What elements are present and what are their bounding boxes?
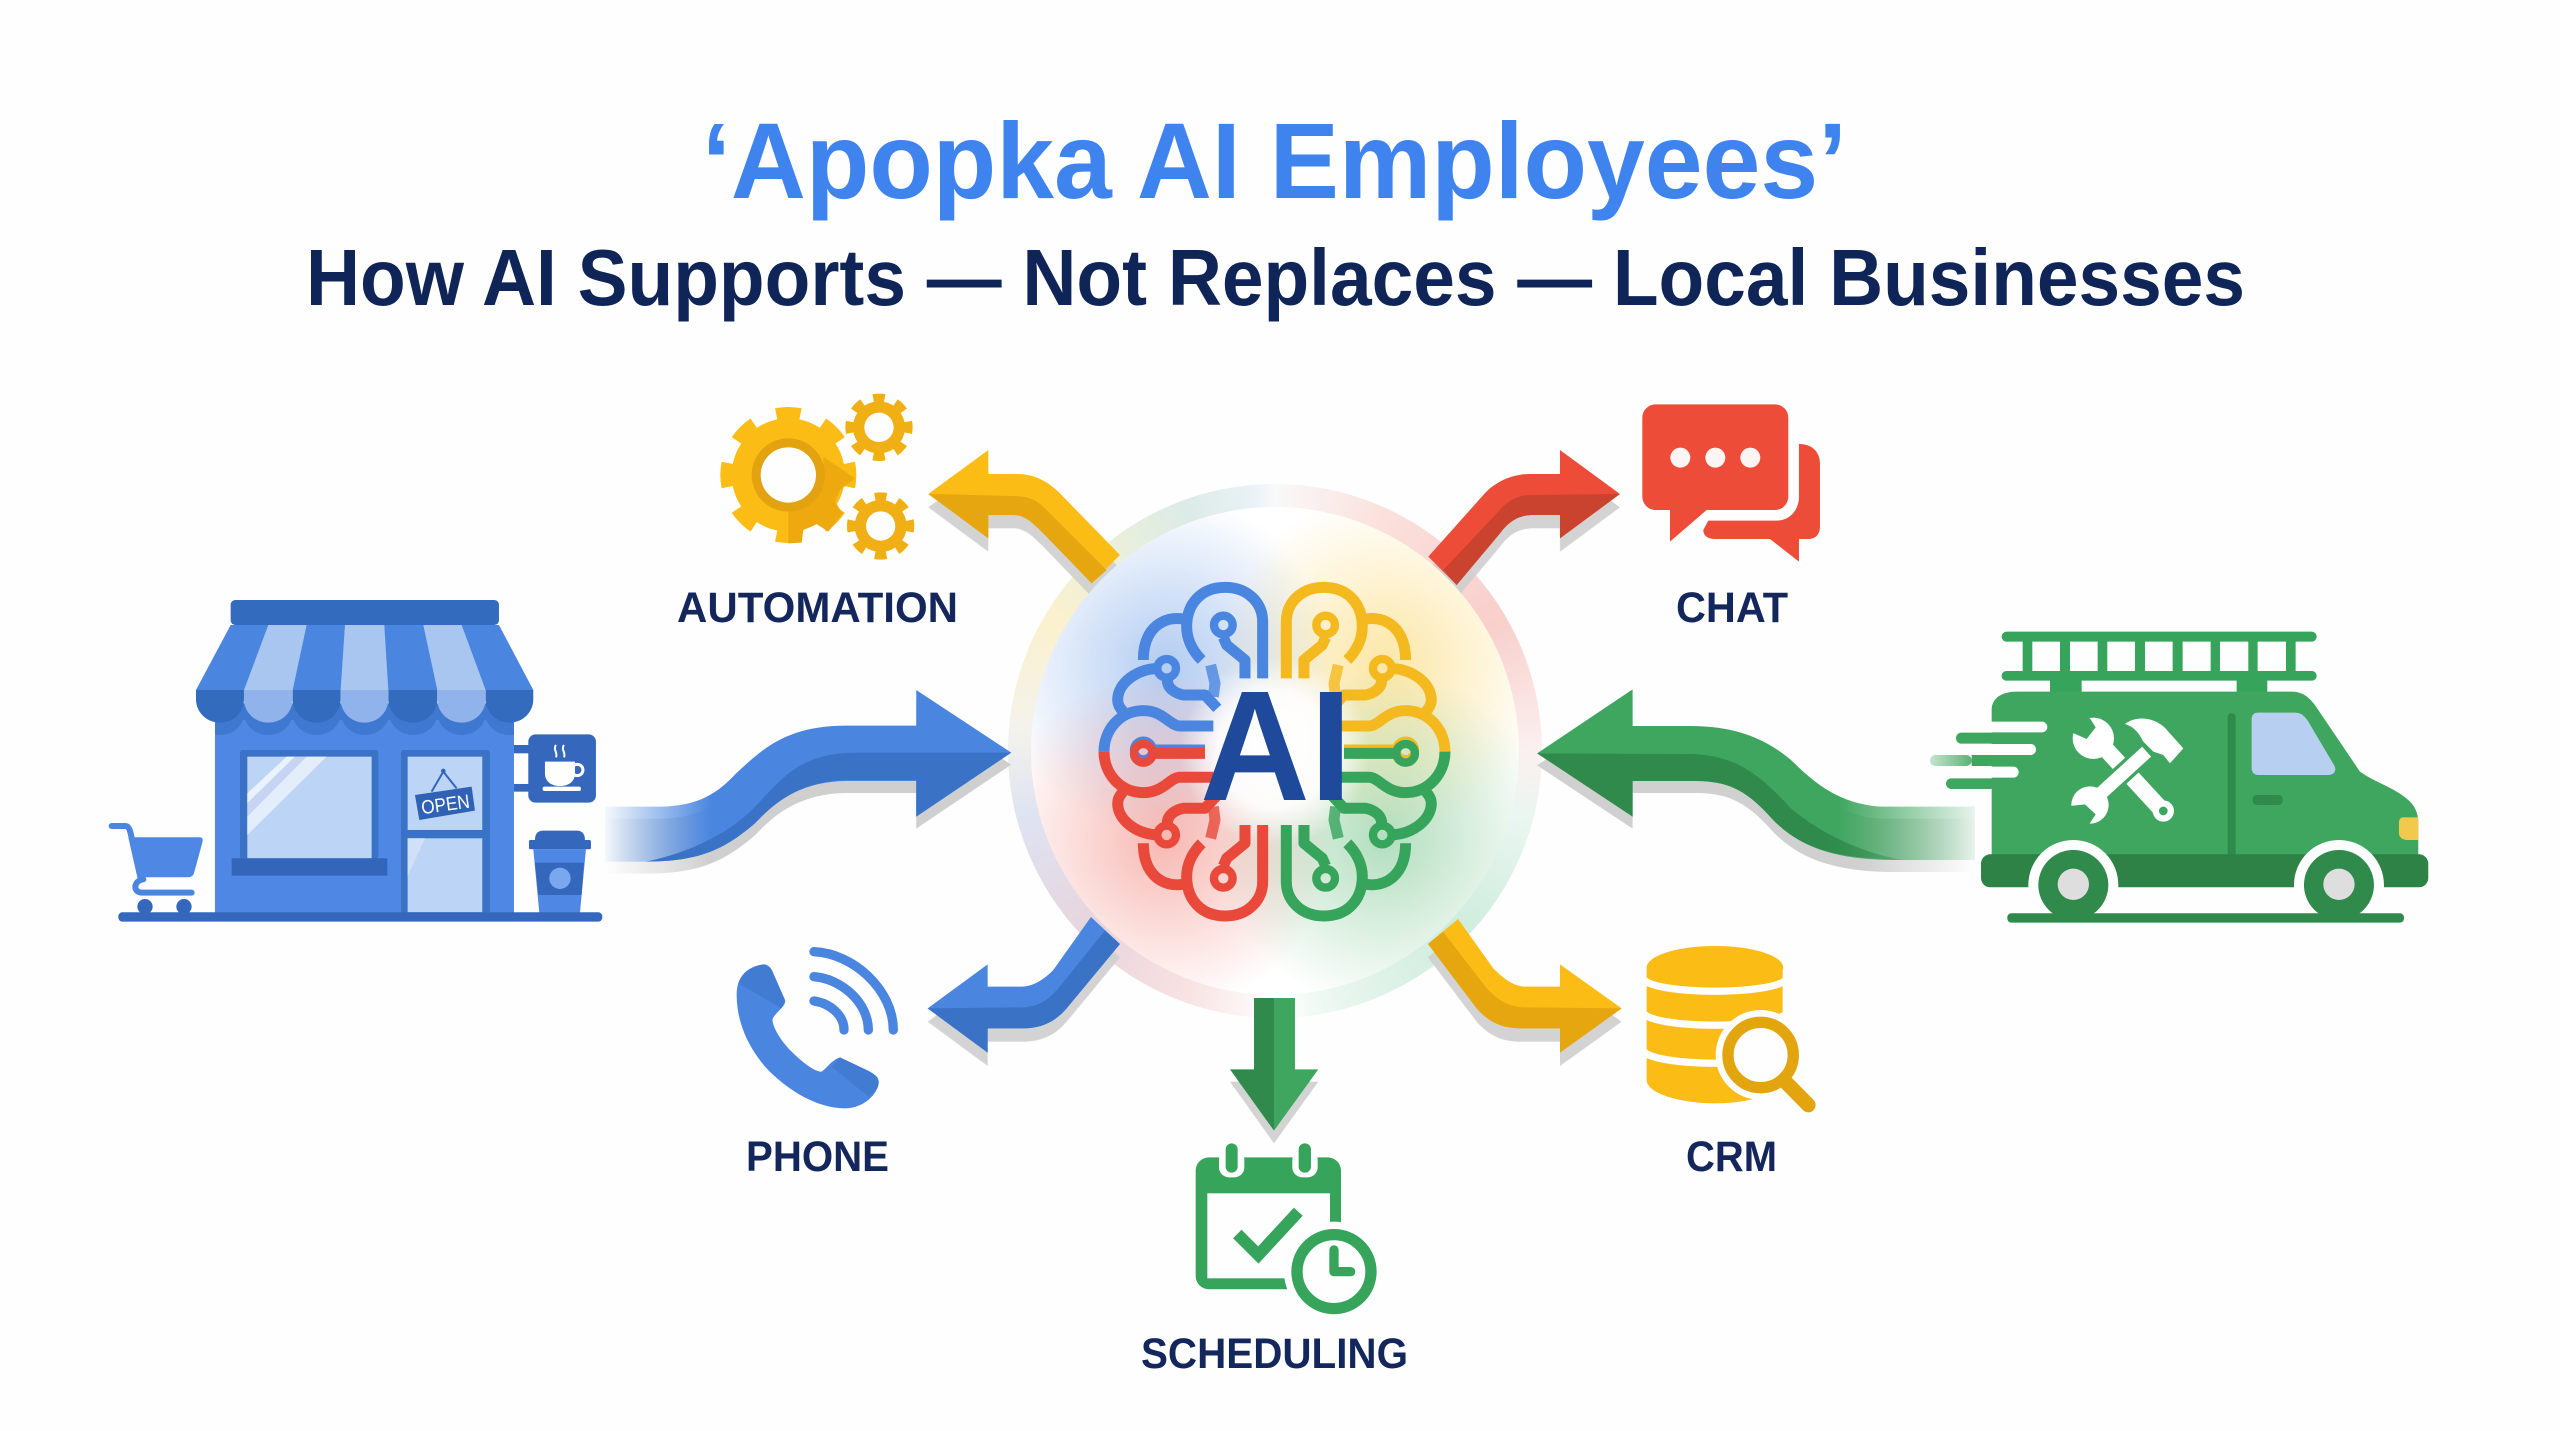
- label: phone: PHONE: [746, 1133, 889, 1181]
- hub ring: [1008, 484, 1542, 1018]
- icon: chat bubbles: [1642, 404, 1820, 562]
- large gear: [727, 414, 855, 543]
- awning valance: [196, 690, 533, 723]
- icon: storefront: [112, 600, 602, 922]
- ground: [2007, 913, 2404, 923]
- building body: [215, 717, 514, 913]
- awning roof bar: [231, 600, 499, 625]
- arrow: shop to hub: [605, 690, 1011, 874]
- hub inner circle: [1031, 507, 1519, 995]
- tools emblem: [2069, 715, 2183, 826]
- arrow: hub to automation: [928, 450, 1120, 583]
- coffee cup: [529, 831, 591, 913]
- cart: [112, 826, 203, 914]
- label: chat: CHAT: [1676, 584, 1788, 632]
- small gear top: [850, 398, 908, 457]
- label: scheduling: SCHEDULING: [1141, 1330, 1408, 1378]
- arrow: hub to scheduling: [1230, 998, 1318, 1131]
- small gear bottom: [851, 497, 910, 555]
- hub colour glows: [1031, 517, 1519, 986]
- label: crm: CRM: [1686, 1133, 1777, 1181]
- AI brain: [1104, 587, 1445, 916]
- arrow: hub to chat: [1428, 450, 1620, 585]
- headlight: [2399, 817, 2418, 840]
- speed lines: [1930, 722, 2047, 789]
- arrow: hub to CRM: [1428, 919, 1622, 1053]
- open sign: [415, 769, 475, 820]
- door: [401, 750, 490, 913]
- label: automation: AUTOMATION: [677, 584, 958, 632]
- icon: database with magnifier: [1644, 946, 1808, 1105]
- awning: [196, 625, 533, 690]
- window: [232, 750, 387, 876]
- door handle: [2253, 795, 2283, 805]
- icon: gears: [727, 398, 910, 555]
- bumper band: [1981, 854, 2428, 887]
- ground: [118, 912, 602, 922]
- arrow: hub to phone: [928, 917, 1120, 1053]
- cafe sign: [514, 734, 596, 803]
- wheel arches: [2028, 840, 2118, 930]
- title: ‘Apopka AI Employees’: [702, 100, 1847, 221]
- arrow shadows: [928, 463, 1622, 1143]
- door line: [2228, 713, 2236, 857]
- open sign: OPEN: [420, 792, 471, 819]
- awning shadow scallops: [215, 703, 514, 735]
- icon: calendar with clock: [1196, 1143, 1384, 1322]
- van body: [1992, 692, 2418, 858]
- wheels: [2038, 850, 2108, 920]
- icon: service van: [1930, 632, 2428, 930]
- van window: [2252, 713, 2335, 775]
- roof ladder: [2002, 632, 2317, 693]
- icon: phone: [737, 952, 893, 1108]
- AI text: AI: [1200, 659, 1352, 834]
- subtitle: How AI Supports — Not Replaces — Local Businesses: [306, 233, 2245, 322]
- arrow: van to hub: [1537, 689, 1975, 872]
- awning stripes: [244, 625, 486, 690]
